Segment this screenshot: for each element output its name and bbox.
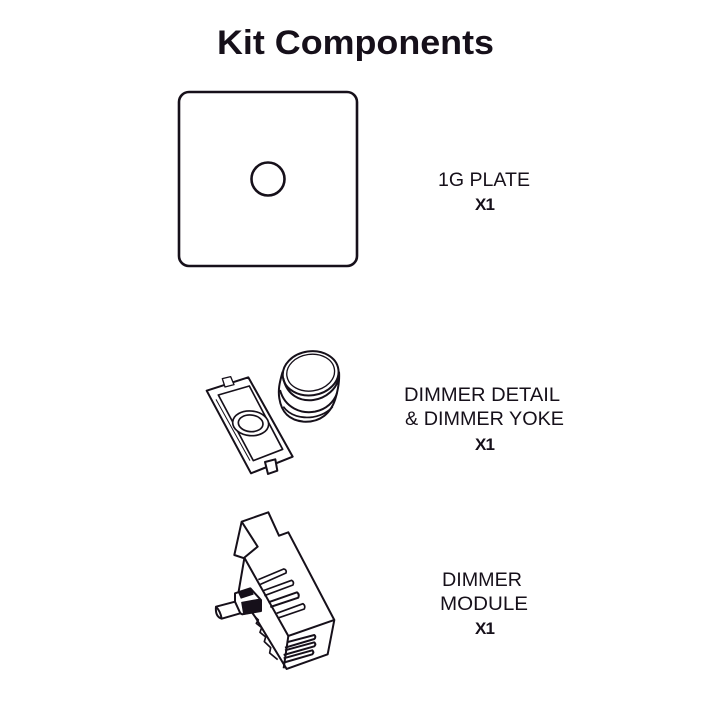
- label: dimmer module: DIMMER: [442, 570, 522, 591]
- label: dimmer detail and yoke: [404, 385, 564, 454]
- label: dimmer detail and yoke: & DIMMER YOKE: [405, 409, 564, 430]
- title: Kit Components: [217, 24, 494, 62]
- label: dimmer module: MODULE: [440, 594, 528, 615]
- label: dimmer module: [440, 570, 528, 638]
- icon: dimmer module: [216, 512, 334, 669]
- label: 1G plate: 1G PLATE: [438, 170, 530, 191]
- label: dimmer detail and yoke: DIMMER DETAIL: [404, 385, 560, 406]
- module slots, end face: [282, 635, 315, 663]
- label: dimmer detail and yoke: X1: [475, 435, 495, 454]
- label: 1G plate: X1: [475, 195, 495, 214]
- label: dimmer module: X1: [475, 619, 495, 638]
- icon: dimmer knob: [279, 348, 341, 422]
- icon: 1G plate: [179, 92, 357, 266]
- shaft: [216, 588, 261, 619]
- icon: dimmer yoke: [207, 377, 293, 474]
- module slots, top face: [258, 569, 305, 618]
- label: 1G plate: [438, 170, 530, 214]
